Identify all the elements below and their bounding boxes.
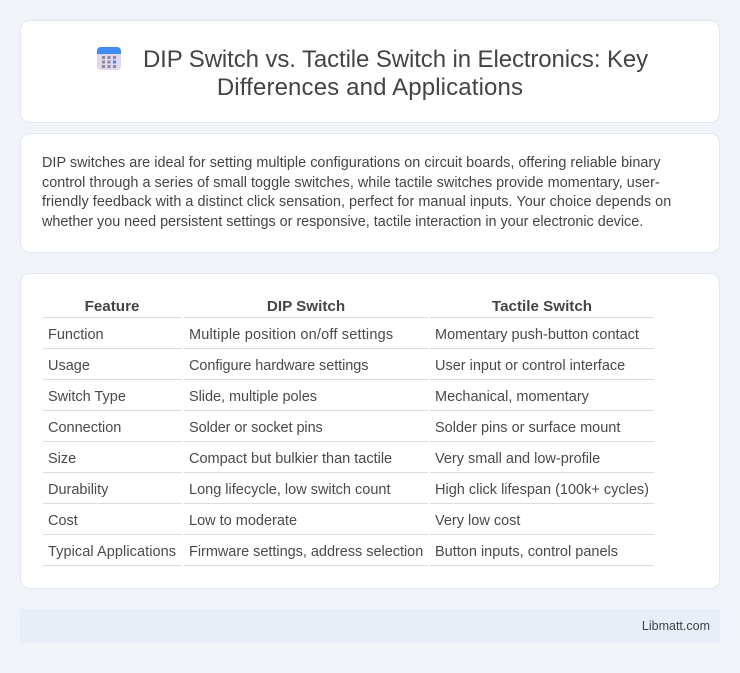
panel: intro paragraph — [20, 133, 720, 253]
text block: intro: friendly feedback with a distinct click sensation, perfect for manual inputs. Your choice depends on — [42, 194, 671, 210]
title: DIP Switch vs. Tactile Switch in Electronics: Key — [143, 46, 648, 73]
text block: intro: control through a series of small toggle switches, while tactile switches provide momentary, user- — [42, 174, 660, 190]
table: Compact but bulkier than tactile — [189, 451, 392, 467]
row: Size: Size — [48, 451, 76, 467]
table: Solder or socket pins — [189, 420, 323, 436]
table: Momentary push-button contact — [435, 327, 639, 343]
table: Tactile Switch — [492, 298, 592, 315]
row: Function: Function — [48, 327, 104, 343]
row: Cost: Cost — [48, 513, 78, 529]
row: Switch Type: Switch Type — [48, 389, 126, 405]
footer text: Libmatt.com — [642, 619, 710, 633]
table: Button inputs, control panels — [435, 544, 618, 560]
panel: title card — [20, 20, 720, 123]
text block: intro: DIP switches are ideal for setting multiple configurations on circuit boards, offering reliable binary — [42, 155, 660, 171]
row: Typical Applications: Typical Applications — [48, 544, 176, 560]
table: Long lifecycle, low switch count — [189, 482, 390, 498]
table: Firmware settings, address selection — [189, 544, 423, 560]
panel: comparison table — [20, 273, 720, 589]
table header: Feature — [85, 298, 139, 315]
text block: intro: whether you need persistent settings or responsive, tactile interaction in your electronic device. — [42, 214, 643, 230]
title — [143, 46, 648, 101]
table: Very low cost — [435, 513, 520, 529]
footer bar — [20, 609, 720, 643]
table: DIP Switch — [267, 298, 345, 315]
table: User input or control interface — [435, 358, 625, 374]
icon: calendar-like grid — [97, 47, 121, 70]
table: Very small and low-profile — [435, 451, 600, 467]
table: Low to moderate — [189, 513, 297, 529]
row: Connection: Connection — [48, 420, 121, 436]
table: Configure hardware settings — [189, 358, 368, 374]
text block: intro — [42, 155, 671, 230]
row: Durability: Durability — [48, 482, 108, 498]
table: Solder pins or surface mount — [435, 420, 620, 436]
table: Mechanical, momentary — [435, 389, 589, 405]
table: High click lifespan (100k+ cycles) — [435, 482, 649, 498]
table: Slide, multiple poles — [189, 389, 317, 405]
row: Usage: Usage — [48, 358, 90, 374]
table: Multiple position on/off settings — [189, 327, 393, 343]
title: Differences and Applications — [217, 74, 523, 101]
